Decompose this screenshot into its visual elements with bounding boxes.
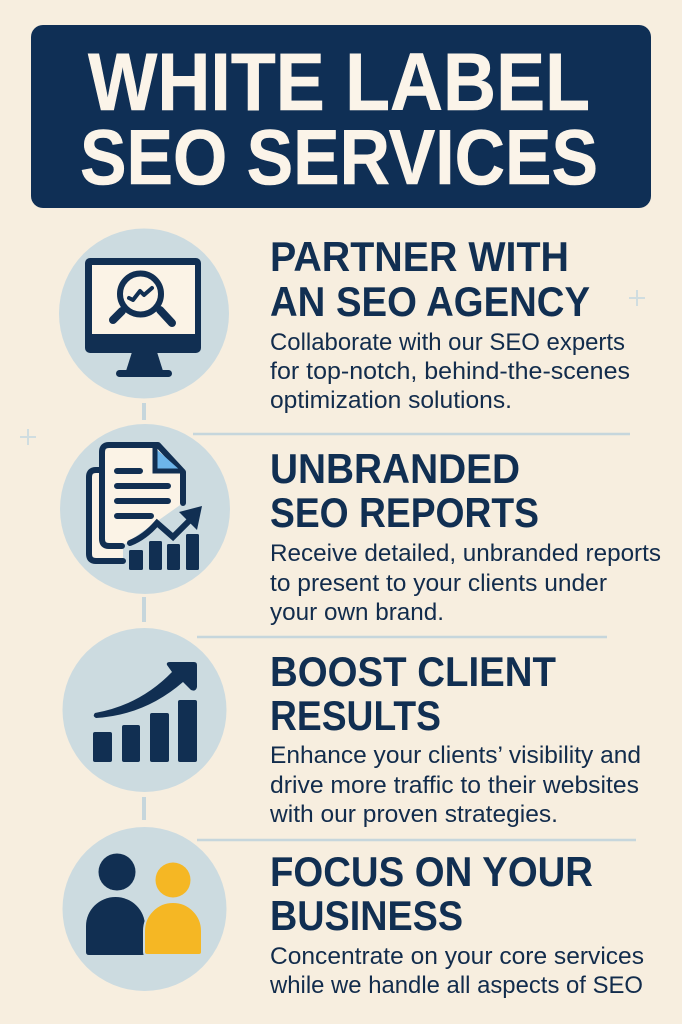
text: partner: Collaborate with our SEO experts [270, 329, 625, 356]
heading: results [270, 648, 556, 739]
heading: reports: UNBRANDED [270, 445, 520, 492]
title: WHITE LABEL [88, 37, 590, 128]
text: reports: your own brand. [270, 599, 444, 626]
text: business: Concentrate on your core services [270, 943, 644, 970]
text: reports: Receive detailed, unbranded reports [270, 540, 661, 567]
heading: partner [270, 233, 590, 325]
text: business: while we handle all aspects of SEO [269, 972, 643, 999]
title [80, 37, 598, 201]
heading: business [270, 848, 593, 939]
icon: two people [62, 827, 226, 991]
icon: monitor with magnifier [59, 228, 229, 398]
title banner [31, 25, 651, 208]
heading: business: BUSINESS [270, 892, 463, 939]
text: reports: to present to your clients under [270, 570, 607, 597]
heading: results: RESULTS [270, 692, 441, 739]
title: SEO SERVICES [80, 113, 598, 201]
heading: results: BOOST CLIENT [270, 648, 556, 695]
heading: partner: PARTNER WITH [270, 233, 569, 280]
heading: reports [270, 445, 539, 536]
icon: growth chart [62, 628, 226, 792]
text: partner: optimization solutions. [270, 387, 512, 414]
text: results [269, 742, 641, 828]
text: business [269, 943, 644, 999]
icon: reports [60, 424, 230, 594]
text: results: Enhance your clients’ visibility and [270, 742, 641, 769]
text: results: drive more traffic to their websites [270, 772, 639, 799]
text: reports [270, 540, 661, 626]
text: partner: for top-notch, behind-the-scenes [270, 358, 630, 385]
heading: reports: SEO REPORTS [270, 489, 539, 536]
text: results: with our proven strategies. [269, 801, 558, 828]
text: partner [270, 329, 630, 414]
heading: business: FOCUS ON YOUR [270, 848, 593, 895]
heading: partner: AN SEO AGENCY [270, 278, 590, 325]
